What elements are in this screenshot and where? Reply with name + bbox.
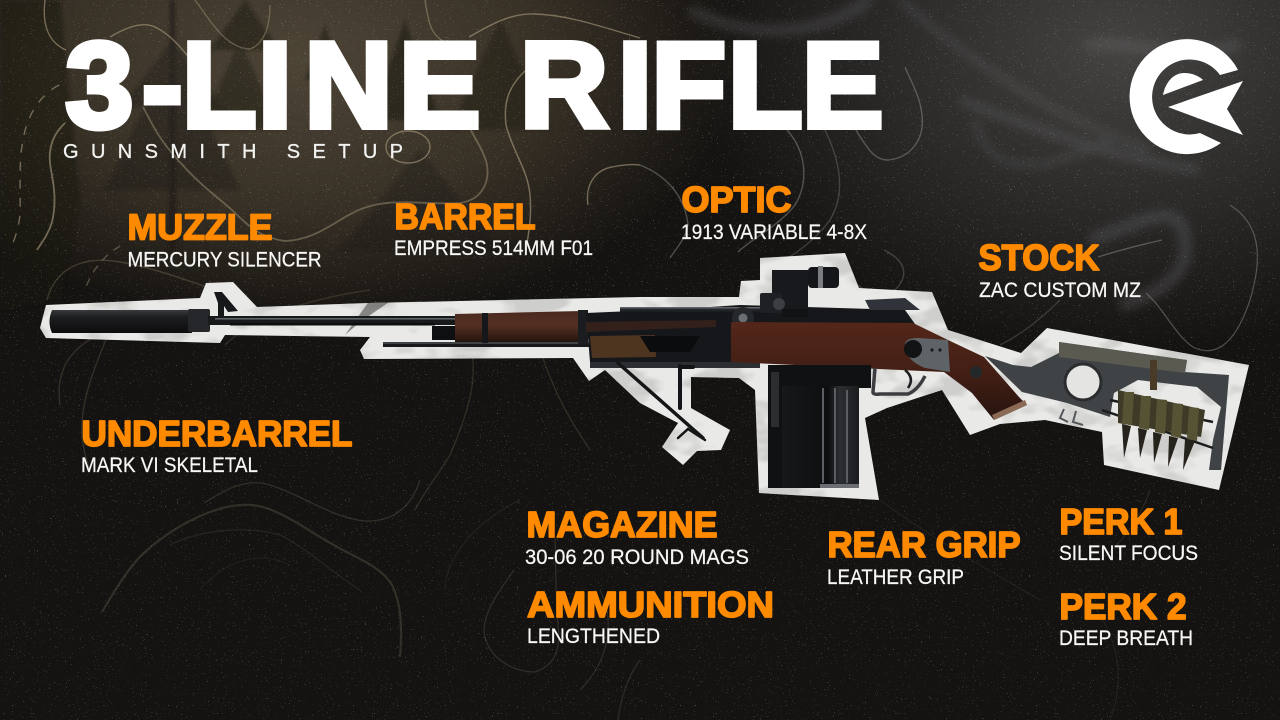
muzzle heading: MUZZLE <box>128 206 272 248</box>
logo <box>1130 39 1243 154</box>
skeletal stock <box>985 342 1229 470</box>
handguard <box>432 310 588 344</box>
perk 1 heading: PERK 1 <box>1060 501 1182 542</box>
title: 3-LINE RIFLE <box>66 17 883 153</box>
stock heading: STOCK <box>978 237 1100 278</box>
ammo belt <box>1118 390 1205 470</box>
label: muzzle <box>128 206 322 272</box>
wooden stock and grip <box>731 322 1027 420</box>
label: optic <box>681 179 867 244</box>
magazine heading: MAGAZINE <box>526 504 718 545</box>
barrel <box>208 316 458 326</box>
label: rear grip <box>827 524 1020 589</box>
subtitle: GUNSMITH SETUP <box>63 141 403 163</box>
label: stock <box>978 237 1141 302</box>
label: perk 2 <box>1059 586 1193 650</box>
contour lines dim <box>640 67 1257 351</box>
stock hooks <box>1060 409 1083 425</box>
smoke streaks <box>690 0 1240 305</box>
underbarrel value: MARK VI SKELETAL <box>81 454 258 477</box>
ammunition value: LENGTHENED <box>527 625 660 648</box>
contour lines lower <box>102 480 1150 720</box>
receiver <box>586 298 920 368</box>
perk 2 heading: PERK 2 <box>1060 586 1186 627</box>
stock value: ZAC CUSTOM MZ <box>979 279 1141 302</box>
label: underbarrel <box>81 413 352 477</box>
underbarrel bipod <box>618 363 705 440</box>
paper cutout <box>30 250 1260 505</box>
magazine <box>768 365 871 488</box>
underbarrel heading: UNDERBARREL <box>82 413 352 454</box>
perk 1 value: SILENT FOCUS <box>1059 542 1198 565</box>
barrel heading: BARREL <box>394 196 536 237</box>
barrel value: EMPRESS 514MM F01 <box>394 237 593 260</box>
ammunition heading: AMMUNITION <box>527 584 774 625</box>
optic <box>760 266 839 317</box>
magazine value: 30-06 20 ROUND MAGS <box>525 546 749 569</box>
gas rod <box>383 342 603 347</box>
label: perk 1 <box>1059 501 1198 565</box>
rifle on torn paper cutout <box>30 250 1260 505</box>
muzzle silencer <box>50 292 238 333</box>
contour lines warm <box>10 0 640 510</box>
trigger guard <box>873 368 925 394</box>
perk 2 value: DEEP BREATH <box>1059 627 1193 650</box>
label: ammunition <box>527 584 774 648</box>
forest silhouettes <box>0 0 550 310</box>
optic heading: OPTIC <box>682 179 792 220</box>
label: magazine <box>525 504 749 569</box>
rear grip heading: REAR GRIP <box>828 524 1020 565</box>
muzzle value: MERCURY SILENCER <box>128 248 322 272</box>
optic value: 1913 VARIABLE 4-8X <box>681 221 867 244</box>
rear grip value: LEATHER GRIP <box>827 566 964 589</box>
label: barrel <box>394 196 593 260</box>
